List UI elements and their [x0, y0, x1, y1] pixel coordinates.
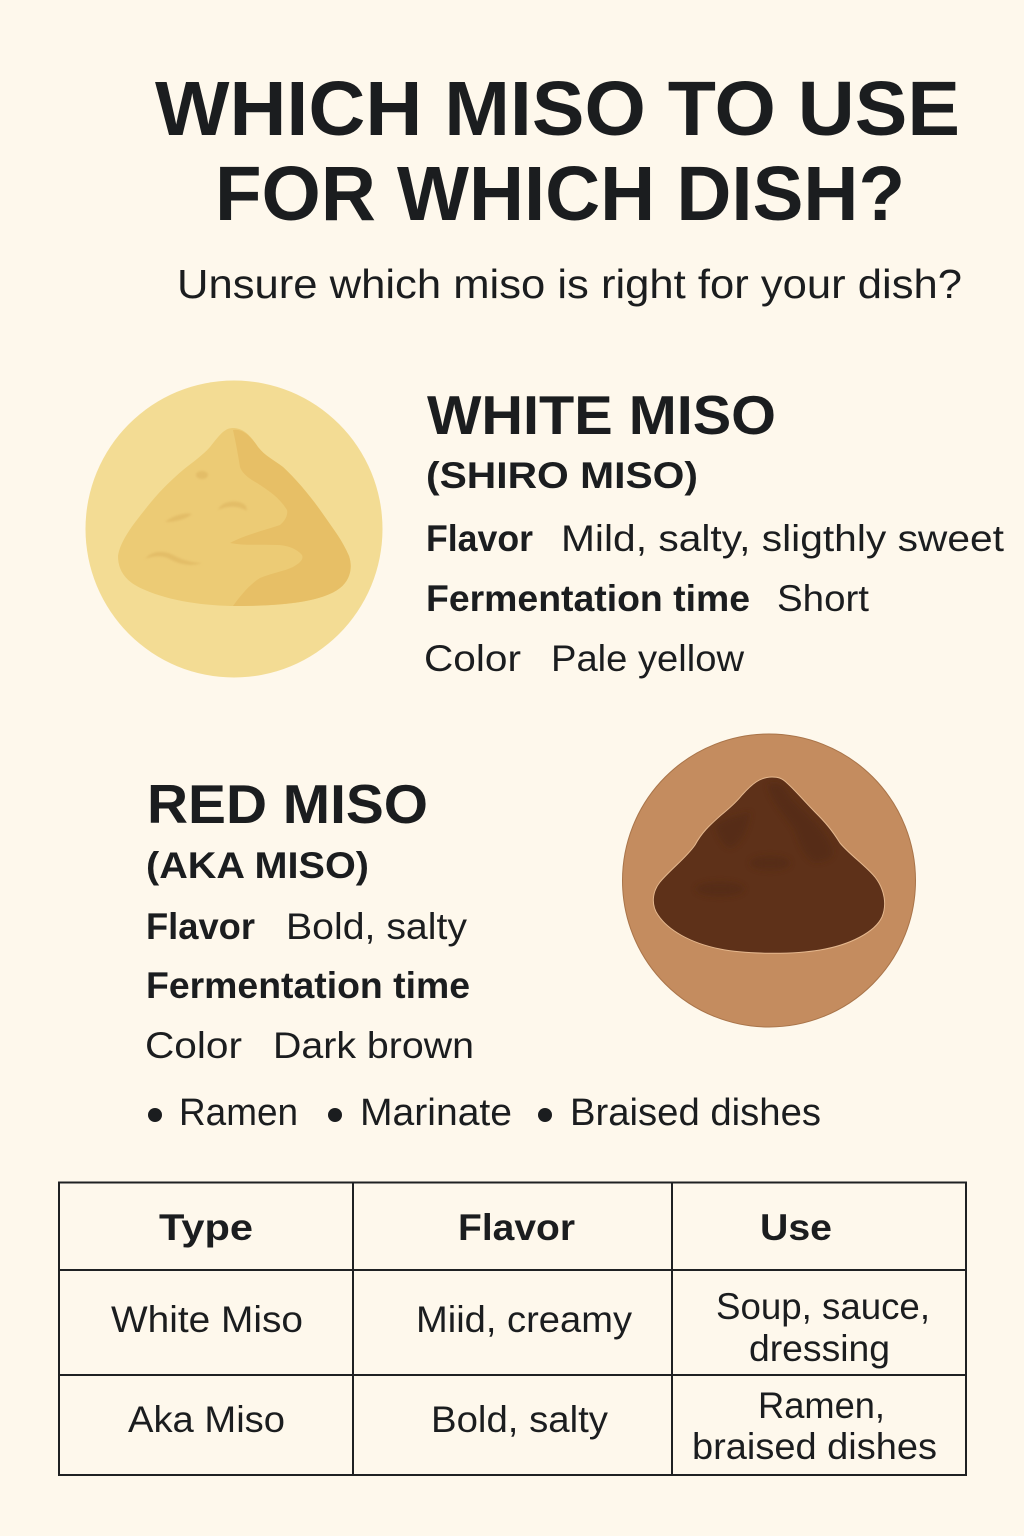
color row: [145, 1025, 474, 1066]
comparison table: [59, 1182, 966, 1475]
table header: [159, 1207, 832, 1248]
bullet: braised dishes: Braised dishes: [570, 1092, 821, 1134]
title: FOR WHICH DISH?: [215, 151, 905, 237]
table row: aka miso: Bold, salty: [431, 1399, 609, 1440]
table header: Type: [159, 1207, 253, 1248]
fermentation row: Short: [777, 578, 870, 619]
panel: red miso: [145, 734, 916, 1066]
subheading: aka miso: (AKA MISO): [146, 845, 369, 886]
flavor row: Flavor: [426, 518, 533, 559]
panel: white miso: [86, 380, 1005, 679]
color row: Color: [424, 638, 521, 679]
bullet: ramen: Ramen: [179, 1092, 298, 1134]
icon: white miso mound: [86, 380, 382, 678]
table row: aka miso: braised dishes: [692, 1426, 937, 1467]
color row: Pale yellow: [551, 638, 744, 679]
table row: white miso: dressing: [749, 1328, 890, 1369]
flavor row: [146, 906, 468, 947]
fermentation row: Fermentation time: [146, 965, 470, 1006]
flavor row: Mild, salty, sligthly sweet: [561, 518, 1005, 559]
title: WHICH MISO TO USE: [155, 66, 960, 152]
table row: aka miso: [128, 1385, 937, 1467]
subheading: shiro miso: (SHIRO MISO): [426, 455, 698, 496]
uses list: [148, 1092, 821, 1134]
flavor row: Bold, salty: [286, 906, 468, 947]
table row: white miso: White Miso: [111, 1299, 303, 1340]
color row: [424, 638, 744, 679]
table header: Flavor: [458, 1207, 575, 1248]
heading: red miso: RED MISO: [147, 773, 428, 835]
texture marks: [696, 783, 833, 896]
bullet: marinate: Marinate: [360, 1092, 512, 1134]
heading: white miso: WHITE MISO: [427, 384, 776, 446]
table header: Use: [760, 1207, 832, 1248]
fermentation row: Fermentation time: [426, 578, 750, 619]
texture marks: [145, 471, 247, 565]
color row: Color: [145, 1025, 242, 1066]
table row: aka miso: Aka Miso: [128, 1399, 285, 1440]
subtitle: Unsure which miso is right for your dish?: [177, 261, 962, 307]
flavor row: Flavor: [146, 906, 255, 947]
icon: red miso mound: [622, 734, 916, 1027]
table row: white miso: Soup, sauce,: [716, 1286, 930, 1327]
flavor row: [426, 518, 1005, 559]
table row: aka miso: Ramen,: [758, 1385, 885, 1426]
title: [155, 66, 960, 237]
table row: white miso: [111, 1286, 930, 1369]
table row: white miso: Miid, creamy: [416, 1299, 633, 1340]
color row: Dark brown: [273, 1025, 474, 1066]
